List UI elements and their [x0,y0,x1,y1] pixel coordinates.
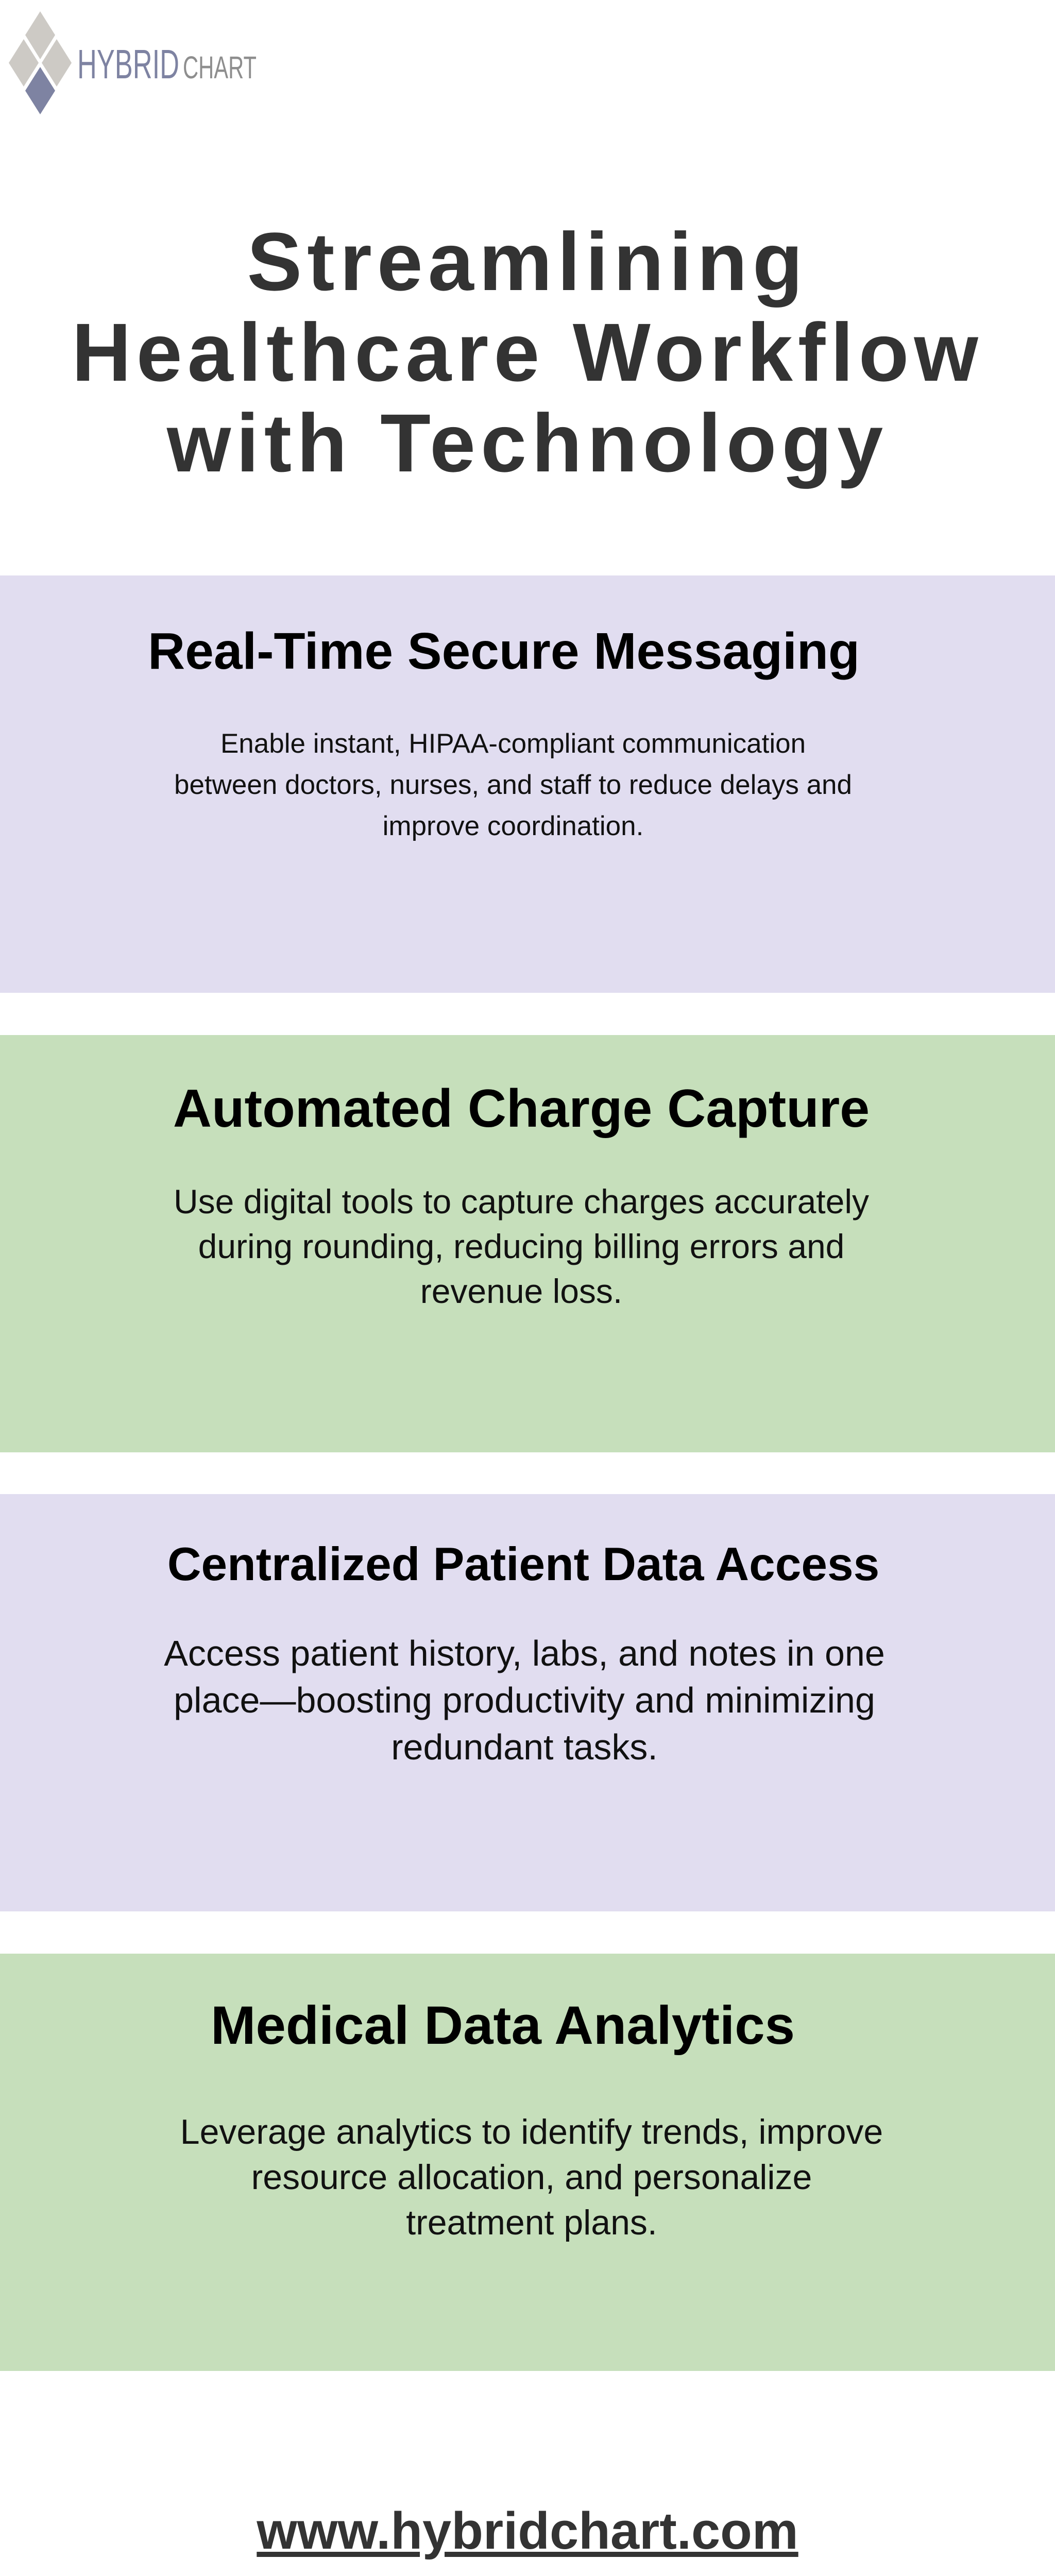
panel: automated charge capture [0,1035,1055,1452]
text block [164,1633,885,1767]
logo: CHART [183,50,257,85]
text block: revenue loss. [420,1272,622,1310]
text block [174,728,852,841]
text block: treatment plans. [406,2203,657,2242]
logo text: HYBRID [77,41,179,87]
text block: Access patient history, labs, and notes in one [164,1633,885,1673]
text block: during rounding, reducing billing errors and [198,1227,844,1265]
text block: Leverage analytics to identify trends, improve [180,2112,883,2151]
heading: Medical Data Analytics [211,1995,795,2056]
text block: Enable instant, HIPAA-compliant communication [220,728,806,759]
logo [9,11,257,114]
text block [180,2112,883,2242]
heading: Automated Charge Capture [173,1079,870,1139]
title: with Technology [167,397,888,489]
panel: real-time secure messaging [0,575,1055,993]
text block [174,1182,869,1310]
panel: centralized patient data access [0,1494,1055,1911]
panel: medical data analytics [0,1954,1055,2371]
text block: Use digital tools to capture charges accurately [174,1182,869,1221]
title: Streamlining [247,215,808,308]
heading: Centralized Patient Data Access [167,1538,879,1590]
title: Healthcare Workflow [72,306,983,398]
text block: redundant tasks. [391,1727,658,1767]
text block: between doctors, nurses, and staff to reduce delays and [174,770,852,800]
heading: Real-Time Secure Messaging [148,622,860,680]
icon: diamonds [9,11,72,114]
title [72,215,983,489]
text block: resource allocation, and personalize [251,2158,812,2197]
text block: improve coordination. [383,811,643,841]
text block: place—boosting productivity and minimizing [174,1680,875,1720]
footer url: www.hybridchart.com [257,2502,798,2560]
